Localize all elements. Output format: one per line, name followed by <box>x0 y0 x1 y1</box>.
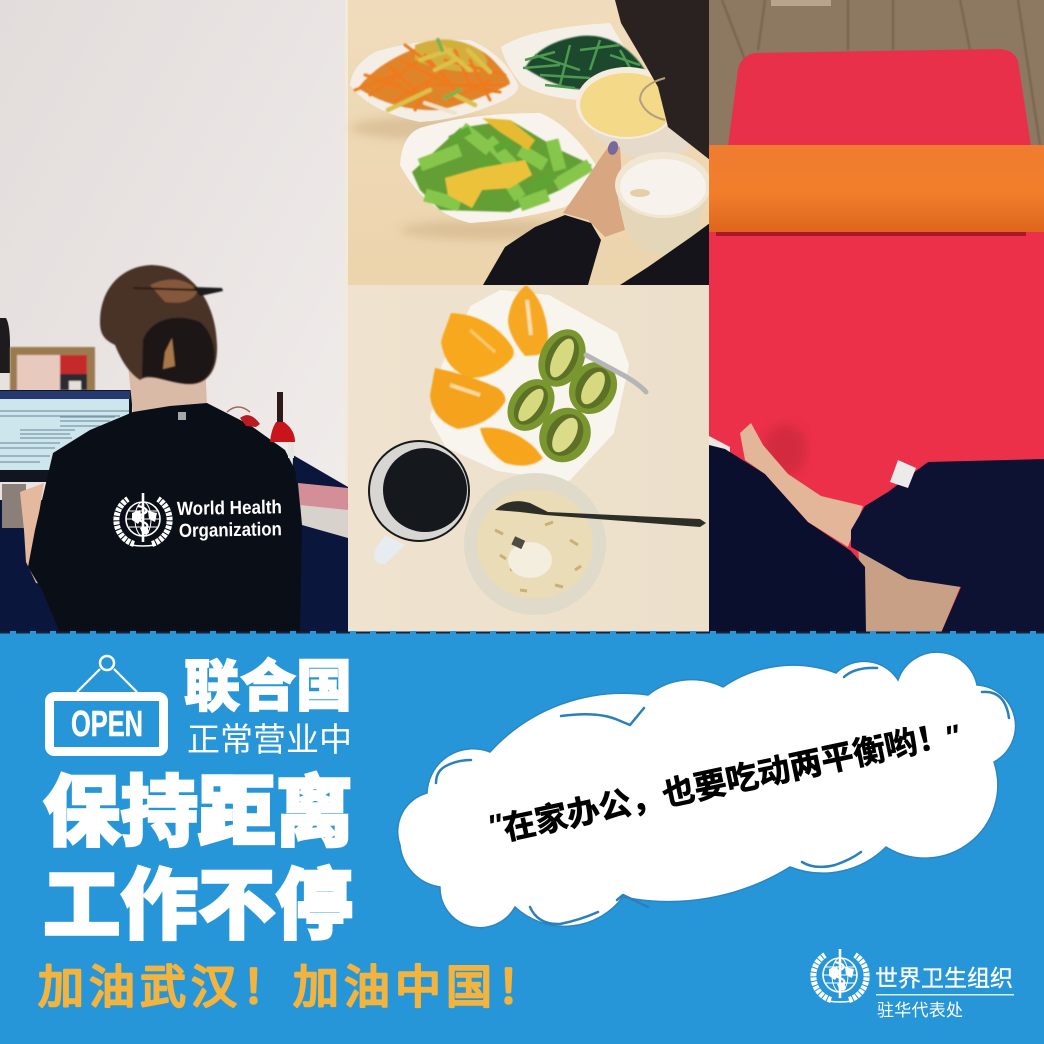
plate shadows <box>350 116 580 240</box>
plate: spinach <box>501 23 645 100</box>
WHO emblem <box>813 949 867 1002</box>
desk <box>0 455 348 633</box>
cloud speech bubble <box>398 652 1016 928</box>
office name: 驻华代表处 <box>877 1001 963 1020</box>
photo: red yoga mat with foam roller <box>709 0 1044 633</box>
slogan: 加油中国！ <box>293 951 548 1017</box>
red teapot <box>227 407 260 427</box>
headline line 1: 保持距离 <box>43 770 353 856</box>
hand holding bowl <box>563 140 625 237</box>
right trouser leg <box>851 459 1044 633</box>
plate: stir-fried carrot <box>350 40 518 122</box>
kiwi halves <box>498 322 626 472</box>
forearm and hand <box>20 483 46 585</box>
quote text: " <box>941 717 964 756</box>
WHO emblem on shirt <box>116 493 170 546</box>
slogan <box>38 951 548 1017</box>
white tag <box>890 460 916 488</box>
sign word: OPEN <box>71 703 143 744</box>
orange wedges <box>430 285 548 466</box>
photo: fruit, coffee and oatmeal breakfast <box>348 285 710 633</box>
open sign icon <box>50 656 164 752</box>
red bell <box>270 392 295 458</box>
shirt lettering: Organization <box>179 519 282 542</box>
fruit plate <box>433 293 626 478</box>
rice bowl <box>615 152 711 254</box>
laptop <box>0 390 132 528</box>
black WHO t-shirt <box>28 403 302 633</box>
slogan: 加油武汉！ <box>38 951 293 1017</box>
organization name: 世界卫生组织 <box>875 965 1013 991</box>
plate: green pepper with egg <box>400 113 596 223</box>
WHO China office logo <box>813 949 1014 1020</box>
black sleeves <box>483 215 710 285</box>
book <box>298 483 348 538</box>
shirt lettering <box>177 497 282 542</box>
cloud inner strokes <box>436 668 1009 924</box>
quote text: 在家办公，也要吃动两平衡哟！ <box>500 717 953 847</box>
orange foam roller <box>709 145 1044 236</box>
picture frame <box>10 347 95 391</box>
quote text: " <box>484 806 507 845</box>
coffee mug <box>369 441 469 564</box>
dark fork <box>495 501 706 527</box>
silver spoon <box>586 355 646 392</box>
heading: United Nations: 联合国 <box>184 655 352 718</box>
left trouser leg <box>709 445 866 633</box>
oatmeal bowl <box>464 473 606 615</box>
shirt lettering: World Health <box>177 497 282 520</box>
headline line 2: 工作不停 <box>43 863 353 949</box>
red shadow under foot <box>763 424 807 476</box>
black ornament on shelf <box>0 318 10 373</box>
hair bun <box>100 265 223 384</box>
photo: person working at laptop in WHO shirt <box>0 0 348 633</box>
blue banner <box>0 634 1044 1044</box>
neck <box>118 345 207 414</box>
photo: lunch with vegetable dishes <box>348 0 711 285</box>
dashed edge <box>0 632 1044 634</box>
lower leg skin <box>858 548 961 633</box>
custard bowl <box>576 67 690 160</box>
hair and glasses <box>615 0 710 160</box>
bare foot <box>740 423 863 547</box>
subheading: open as usual: 正常营业中 <box>187 721 352 758</box>
mat <box>709 49 1044 633</box>
